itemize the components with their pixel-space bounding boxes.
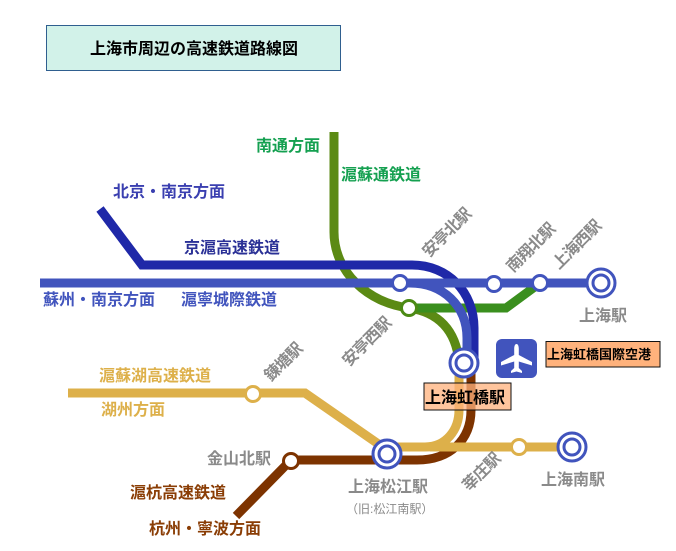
line: Shanghai-Suzhou-Huzhou railway [68, 372, 570, 450]
label: Shanghai-Hangzhou railway: 滬杭高速鉄道 [130, 483, 226, 502]
label: Hangzhou Ningbo direction: 杭州・寧波方面 [149, 519, 261, 538]
station: Shanghai Hongqiao [450, 349, 478, 377]
label: Shanghai Hongqiao airport [546, 342, 660, 367]
title: 上海市周辺の高速鉄道路線図 [90, 39, 298, 58]
label: Nantong direction: 南通方面 [256, 136, 320, 155]
label: Shanghai West station: 上海西駅 [549, 217, 605, 273]
station: Xinzhuang [512, 440, 526, 454]
label: Shanghai Hongqiao station [424, 383, 511, 410]
station: Nanxiang North [486, 276, 502, 292]
label: Anting West station: 安亭西駅 [338, 313, 395, 370]
station: Anting West [402, 300, 416, 316]
label: Shanghai Hongqiao station: 上海虹橋駅 [425, 388, 505, 407]
line: Beijing-Shanghai high-speed railway [100, 209, 474, 362]
station: Shanghai [587, 269, 615, 297]
label: Xinzhuang station: 莘庄駅 [458, 449, 505, 495]
label: Jinshan North station: 金山北駅 [207, 449, 271, 468]
line: Shanghai-Nanjing intercity railway [40, 283, 600, 362]
station: Shanghai Songjiang [373, 440, 401, 468]
label: Shanghai Hongqiao airport: 上海虹橋国際空港 [547, 347, 651, 362]
line: Shanghai-Hangzhou high-speed railway [236, 372, 471, 516]
label: Suzhou Nanjing direction: 蘇州・南京方面 [43, 290, 155, 309]
label: Anting North station: 安亭北駅 [418, 204, 475, 261]
station: Anting North [392, 276, 408, 290]
station: Jinshan North [284, 454, 298, 468]
label: Shanghai-Nanjing intercity railway: 滬寧城際鉄道 [181, 290, 277, 309]
label: Beijing-Shanghai high-speed railway: 京滬高速鉄道 [184, 238, 280, 257]
label: Shanghai-Suzhou-Huzhou railway: 滬蘇湖高速鉄道 [99, 366, 211, 385]
icon: airport [496, 339, 537, 378]
title [46, 26, 340, 70]
label: Shanghai station: 上海駅 [579, 307, 627, 325]
label: Huzhou direction: 湖州方面 [101, 400, 165, 419]
label: Beijing Nanjing direction: 北京・南京方面 [113, 182, 225, 201]
label: Shanghai South station: 上海南駅 [541, 471, 605, 489]
label: former name: （旧:松江南駅） [346, 501, 433, 516]
label: Nanxiang North station: 南翔北駅 [503, 220, 559, 276]
station: Shanghai West [532, 276, 548, 290]
station: Shanghai South [558, 433, 586, 461]
label: Shanghai-Suzhou-Nantong railway: 滬蘇通鉄道 [341, 166, 421, 184]
line: Shanghai-Suzhou-Nantong railway [334, 132, 540, 362]
label: Shanghai Songjiang station: 上海松江駅 [348, 477, 428, 496]
station: Liantang [246, 386, 260, 402]
label: Liantang station: 錬塘駅 [260, 339, 307, 385]
